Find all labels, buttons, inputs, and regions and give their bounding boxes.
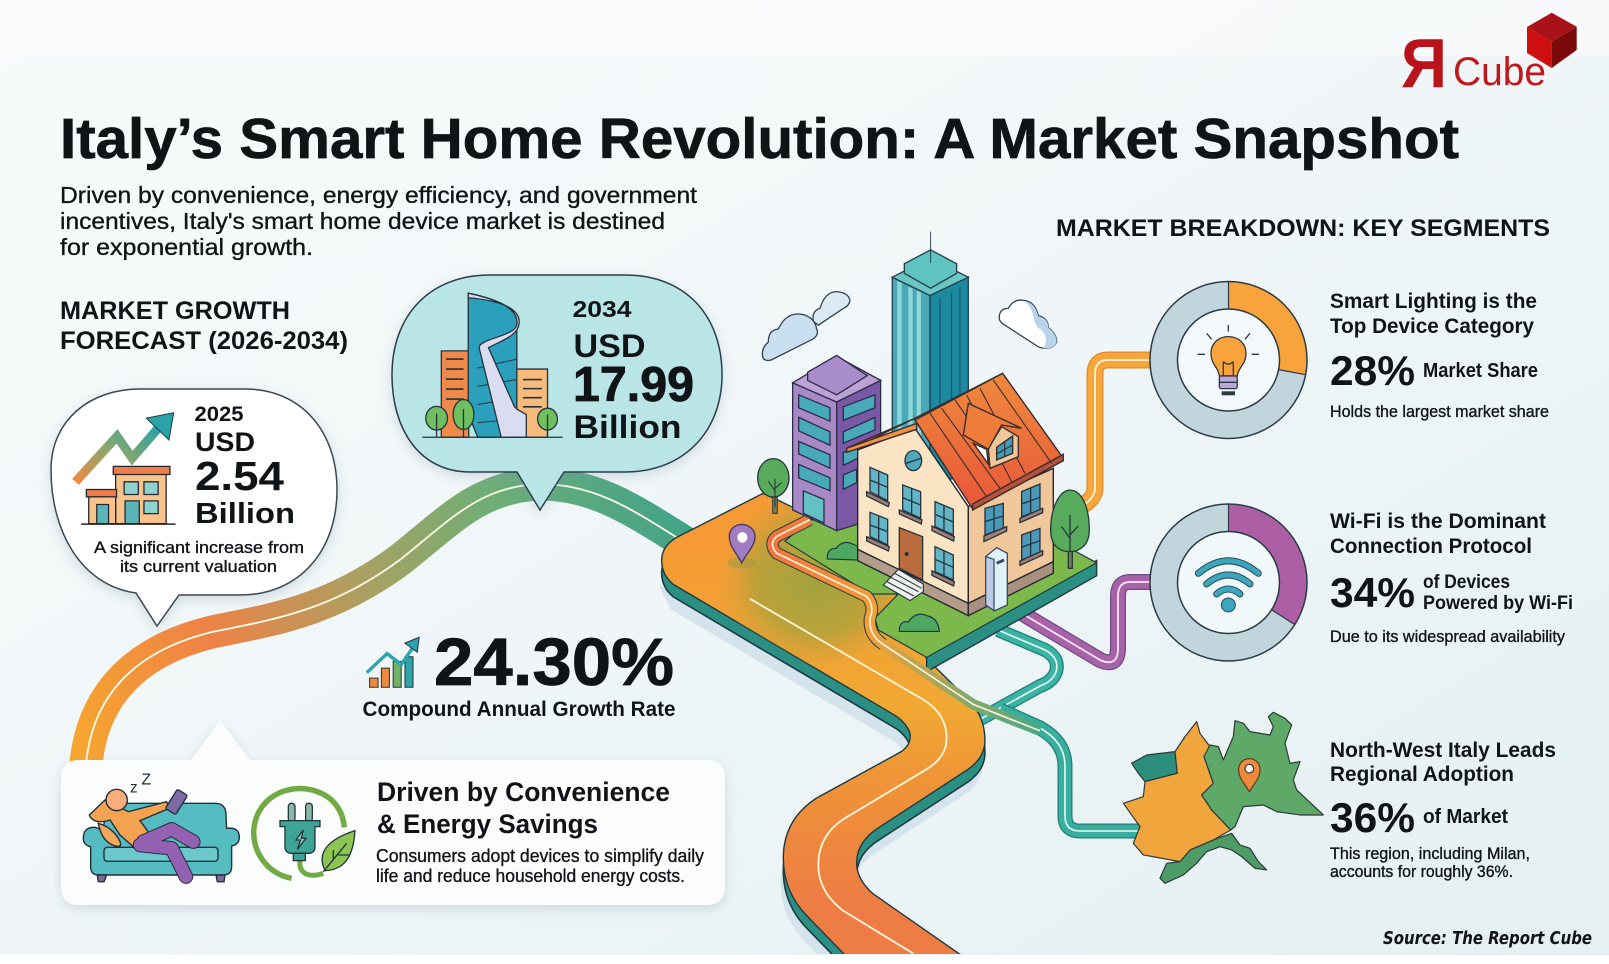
segment: smart lighting: Top Device Category — [1330, 314, 1534, 338]
icon: person on sofa: Z — [141, 772, 151, 789]
platform and winding road — [659, 232, 1097, 964]
segment: wi-fi: Powered by Wi-Fi — [1423, 592, 1573, 614]
windows — [867, 467, 1043, 586]
drivers card — [61, 720, 725, 905]
cloud right — [999, 300, 1057, 349]
icon: bars and arrow — [367, 637, 419, 687]
drivers card: Driven by Convenience — [377, 777, 670, 807]
drivers card: Consumers adopt devices to simplify daily — [376, 845, 705, 866]
boiler unit — [986, 548, 1007, 611]
icon: light bulb — [1198, 325, 1259, 393]
segment: smart lighting: Market Share — [1423, 360, 1538, 382]
bubble: 2025 value: A significant increase from — [94, 538, 304, 557]
subtitle: incentives, Italy's smart home device market is destined — [60, 208, 665, 234]
subtitle — [60, 182, 698, 260]
segment: wi-fi: of Devices — [1423, 571, 1510, 593]
bubble: 2025 value: USD — [195, 427, 255, 457]
bubble: 2025 value — [51, 389, 337, 626]
connector: teal loop — [975, 630, 1057, 722]
connector: orange to lighting — [1078, 360, 1150, 509]
logo: RCube: Я — [1401, 24, 1447, 102]
segment: wi-fi — [1150, 504, 1573, 661]
tree right — [1051, 490, 1089, 568]
cloud left — [762, 292, 850, 361]
bubble: 2034 value — [392, 275, 722, 510]
icon: city towers — [422, 293, 563, 437]
segment: north-west italy: Regional Adoption — [1330, 762, 1514, 786]
segment: wi-fi: Due to its widespread availability — [1330, 627, 1565, 646]
segment: north-west italy: This region, including Milan, — [1330, 844, 1530, 863]
logo: RCube — [1401, 13, 1577, 102]
icon: plug and leaf — [254, 789, 355, 878]
segment: smart lighting: 28% — [1330, 347, 1415, 394]
segment: smart lighting: Holds the largest market share — [1330, 402, 1549, 421]
growth road ribbon — [86, 484, 700, 764]
walls — [858, 428, 1053, 616]
roof — [847, 373, 1063, 510]
donut chart 28% — [1150, 282, 1307, 438]
bubble: 2034 value: 2034 — [572, 296, 632, 322]
segment: wi-fi: 34% — [1330, 569, 1415, 616]
subtitle: Driven by convenience, energy efficiency, and government — [60, 182, 698, 208]
left bush — [827, 542, 858, 560]
location pin — [728, 524, 756, 569]
segment: north-west italy: of Market — [1423, 806, 1508, 828]
segment: north-west italy: 36% — [1330, 794, 1415, 841]
bubble: 2025 value: its current valuation — [120, 557, 277, 576]
steps — [883, 569, 923, 601]
donut chart 34% — [1150, 504, 1307, 661]
heading: market breakdown: MARKET BREAKDOWN: KEY SEGMENTS — [1056, 215, 1550, 242]
drivers card: & Energy Savings — [377, 809, 598, 839]
bubble: 2025 value: 2025 — [194, 403, 244, 426]
icon: rising arrow and building — [76, 413, 176, 524]
lawn — [785, 520, 1097, 672]
tree left — [758, 459, 789, 513]
title: Italy’s Smart Home Revolution: A Market Snapshot — [60, 107, 1459, 171]
heading: market growth forecast — [60, 297, 348, 355]
skyscraper — [892, 232, 968, 479]
drivers card: life and reduce household energy costs. — [376, 865, 685, 886]
dormer — [963, 403, 1022, 468]
segment: north-west italy: accounts for roughly 36%. — [1330, 862, 1513, 881]
connector: purple to wi-fi — [1023, 582, 1150, 662]
bush — [899, 614, 939, 631]
CAGR stat: 24.30% — [434, 625, 674, 700]
segment: north-west italy — [1123, 712, 1556, 883]
CAGR stat — [362, 625, 676, 721]
bubble: 2034 value: Billion — [574, 409, 682, 445]
icon: person on sofa: z — [130, 780, 138, 797]
segment: north-west italy: North-West Italy Leads — [1330, 738, 1556, 762]
bubble: 2025 value: Billion — [195, 498, 295, 530]
subtitle: for exponential growth. — [60, 234, 313, 260]
map of north-west italy — [1123, 712, 1323, 883]
bubble: 2034 value: USD — [574, 328, 646, 364]
segment: smart lighting: Smart Lighting is the — [1330, 289, 1537, 313]
icon: person on sofa — [83, 772, 239, 882]
logo: RCube: Cube — [1453, 50, 1546, 94]
segment: wi-fi: Connection Protocol — [1330, 534, 1532, 558]
bubble: 2025 value: 2.54 — [195, 453, 284, 499]
house — [827, 373, 1089, 616]
heading: market growth forecast: MARKET GROWTH — [60, 297, 290, 325]
icon: wi-fi — [1198, 561, 1258, 612]
heading: market growth forecast: FORECAST (2026-2034) — [60, 327, 348, 355]
oval window — [905, 451, 922, 471]
CAGR stat: Compound Annual Growth Rate — [362, 698, 676, 721]
door — [899, 528, 923, 580]
purple building — [793, 355, 881, 531]
segment: smart lighting — [1150, 282, 1549, 438]
map pin — [1239, 759, 1260, 792]
small road — [772, 520, 1040, 731]
bubble: 2034 value: 17.99 — [573, 358, 694, 412]
connector: teal to map — [1000, 710, 1140, 831]
segment: wi-fi: Wi-Fi is the Dominant — [1330, 509, 1546, 533]
